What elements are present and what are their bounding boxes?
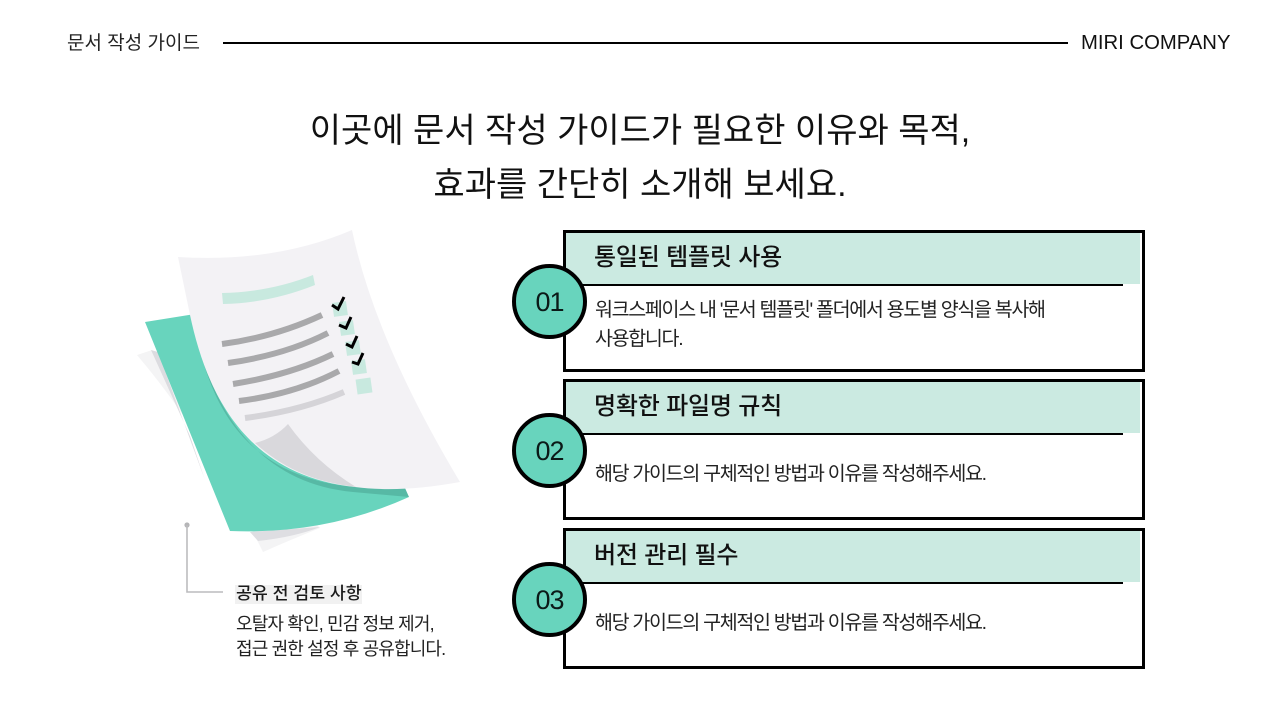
checkboxes [332,301,372,394]
panel: step 1 [563,230,1145,372]
callout body: 오탈자 확인, 민감 정보 제거, [236,614,434,634]
step 2 text: 해당 가이드의 구체적인 방법과 이유를 작성해주세요. [595,463,986,485]
header: document label: 문서 작성 가이드 [67,33,200,54]
folded corner [255,424,356,487]
title: 이곳에 문서 작성 가이드가 필요한 이유와 목적, [310,112,970,150]
callout body [236,614,445,659]
step 1 text: 워크스페이스 내 '문서 템플릿' 폴더에서 용도별 양식을 복사해 [595,299,1045,321]
step 2 heading band [566,382,1140,433]
header: company name: MIRI COMPANY [1081,32,1230,54]
badge 02 [512,413,587,488]
teal shadow [200,350,409,497]
back grey paper [137,350,320,552]
step 3 text: 해당 가이드의 구체적인 방법과 이유를 작성해주세요. [595,612,986,634]
step 1 text: 사용합니다. [595,328,682,350]
title: 효과를 간단히 소개해 보세요. [433,166,847,204]
step 1 text [595,299,1045,350]
check marks [332,297,363,364]
badge 02: 02 [535,436,564,466]
white page [178,230,460,489]
teal sheet [145,314,409,531]
badge 03: 03 [535,585,564,615]
callout text [235,583,445,659]
title [310,112,970,204]
step 3 heading band [566,531,1140,582]
page heading bar [222,275,315,304]
step 1 heading band: 통일된 템플릿 사용 [594,244,782,271]
step 2 heading band: 명확한 파일명 규칙 [594,393,782,420]
text lines [222,315,344,418]
badge 03 [512,562,587,637]
header line [223,42,1068,44]
badge 01: 01 [535,287,564,317]
panel: step 2 [563,379,1145,520]
step 3 heading band: 버전 관리 필수 [594,542,738,569]
illustration: documents [138,230,460,552]
callout connector [184,522,223,593]
badge 01 [512,264,587,339]
callout heading: 공유 전 검토 사항 [236,583,362,603]
step 1 heading band [566,233,1140,284]
panel: step 3 [563,528,1145,669]
callout body: 접근 권한 설정 후 공유합니다. [236,639,445,659]
